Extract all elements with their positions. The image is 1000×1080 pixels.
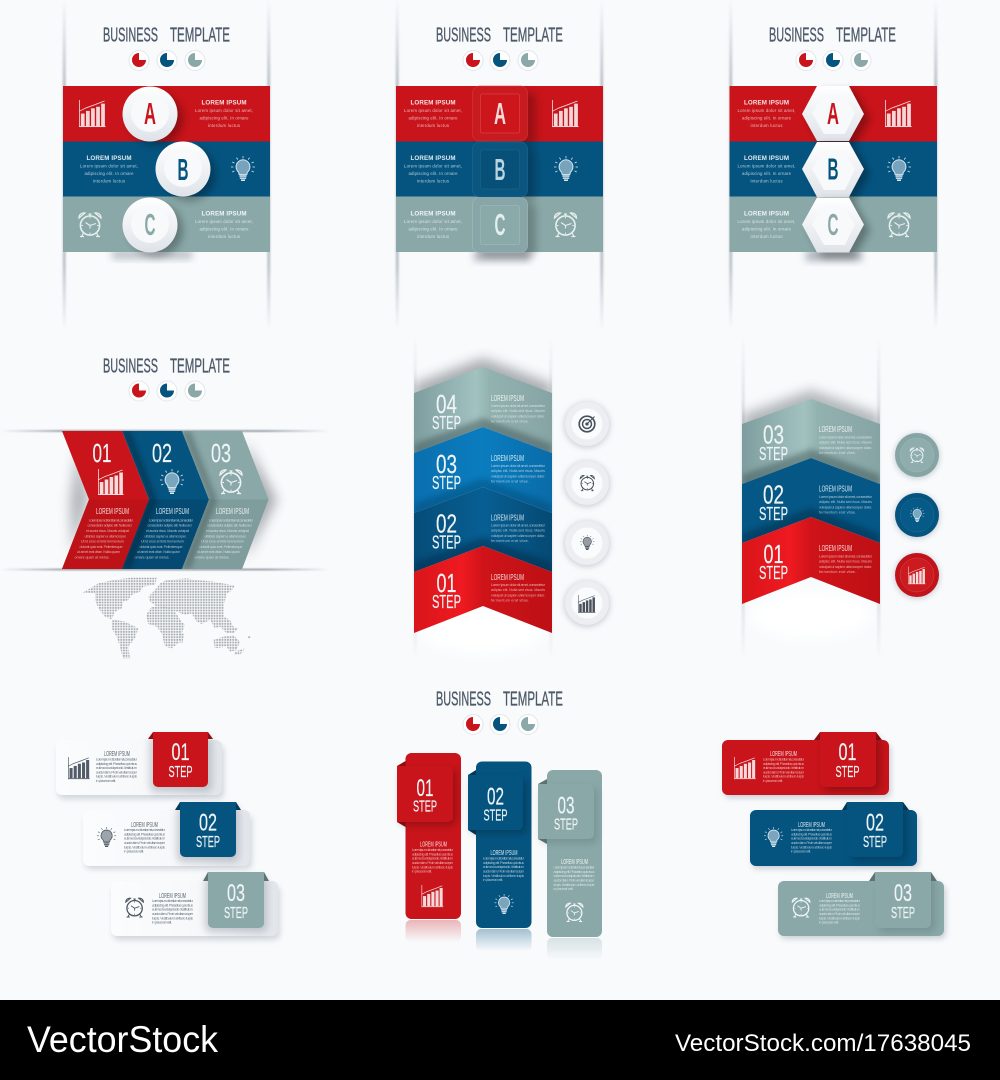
step 01 chevron: STEP [432,591,461,612]
text C: adipiscing elit. In ornare [200,226,249,232]
heading: TEMPLATE [170,356,230,378]
panel: vertical four step chevrons [413,352,612,637]
icon: chart [885,100,912,127]
text A: adipiscing elit. In ornare [408,116,458,120]
text C: Lorem ipsum dolor sit amet, [195,219,253,224]
glass badge B: B [494,152,506,187]
step 02 chevron: STEP [759,503,788,524]
panel: template C hexagons [730,0,937,330]
column 03: euismod a volutpat odio. Vestibulum [554,874,594,878]
icon badge: clock [564,461,610,507]
card 01: Lorem ipsum dolor sit amet, consectetur [96,758,138,762]
chevron 02: Ut id eros et felis fermentum [141,540,184,544]
card 01: turpis. Vestibulum at libero turpis [96,775,137,779]
text B: Lorem ipsum dolor sit amet, [80,164,138,168]
step 03 chevron [414,427,552,520]
chevron 01: 01 [92,438,112,468]
footer bar [0,1000,1000,1080]
text C: interdum luctus [417,234,449,239]
glass badge C [472,198,536,257]
card 02: Lorem ipsum dolor sit amet, consectetur [791,828,833,832]
card 03: euismod a volutpat odio. Vestibulum [152,908,193,912]
text C [738,210,796,239]
heading: BUSINESS [436,24,491,46]
chevron 02: Lorem ipsum dolor sit amet, consectetur [149,518,194,522]
text A: LOREM IPSUM [410,100,456,106]
chevron shadows [70,440,277,560]
column 01: turpis. Vestibulum at libero turpis [412,865,453,869]
hexagon badge A: A [827,96,839,131]
step 02 chevron: 02 [763,480,784,510]
chevron 02: 02 [152,438,172,468]
column 03: auctor diam. Proin vel ullamcorper [554,878,595,882]
chevron 01: et auctor risus. Mauris volutpat [86,529,129,533]
pie icons [463,714,538,734]
card 03: 03 [227,880,245,907]
card 02: adipiscing elit. Phasellus quis risus [791,832,832,836]
badge C: C [144,207,156,242]
text A: LOREM IPSUM [202,100,246,106]
chevron 03: Ut id eros et felis fermentum [201,540,244,544]
text B: adipiscing elit. In ornare [742,171,792,176]
card 02: 02 [199,810,217,836]
panel: colored cards with tabs [722,732,946,939]
badge A [122,86,183,146]
pie icons [796,50,871,70]
text A: LOREM IPSUM [744,100,789,106]
card 01: LOREM IPSUM [104,751,130,758]
text C: adipiscing elit. In ornare [742,226,792,232]
card 03: in placerat velit. [819,921,839,925]
chevron 02: et auctor risus. Mauris volutpat [146,529,189,533]
text A [738,100,796,128]
card 03: turpis. Vestibulum at libero turpis [819,916,860,920]
chevron 01: consectetur adipisc elit. Nulla sed [88,524,132,528]
text C: interdum luctus [208,234,240,239]
column 03: LOREM IPSUM [561,859,588,866]
step 02 chevron: volutpat ut sapien ullamcorper dolor. [819,505,872,509]
column 03: STEP [554,816,578,834]
chevron 02: ultricies sapien a ullamcorper. [144,534,187,538]
icon: bulb [231,156,255,181]
icon badge: chart [564,581,610,627]
chevron 01: ornare quam at metus. [74,556,110,560]
text B: Lorem ipsum dolor sit amet, [738,164,796,168]
column 03: 03 [558,792,574,820]
chevron 03: ornare quam at metus. [194,556,230,560]
column 01: LOREM IPSUM [420,842,447,848]
colored bands [396,86,603,261]
text A [404,100,462,128]
card 01: adipiscing elit. Phasellus quis risus [96,762,137,766]
step 04 chevron: STEP [432,412,461,433]
step 01 chevron: volutpat ut sapien ullamcorper dolor. [819,565,872,569]
text B: interdum luctus [417,178,449,184]
step 04 chevron: 04 [436,389,457,419]
chevron 02 [122,431,209,569]
heading: BUSINESS [436,688,491,710]
card 01: euismod a volutpat odio. Vestibulum [763,766,804,770]
badge C [122,198,183,257]
step 02 chevron: volutpat ut sapien ullamcorper dolor. [491,534,545,538]
column 02 [468,762,532,951]
card 03: 03 [894,880,912,907]
white glow below chevrons [423,610,543,654]
step 01 chevron: LOREM IPSUM [491,573,524,582]
card 01 [722,732,891,798]
badge B: B [178,152,188,187]
step 01 chevron [742,517,880,604]
card 03: in placerat velit. [152,921,172,925]
text B: LOREM IPSUM [744,155,789,162]
card 03: LOREM IPSUM [826,893,853,900]
text B: interdum luctus [93,178,125,184]
column 02: auctor diam. Proin vel ullamcorper [483,870,525,874]
text C: LOREM IPSUM [744,210,789,218]
chevron 03: consectetur adipisc elit. Nulla sed [208,524,252,528]
step 01 chevron: 01 [764,539,784,569]
dotted world map [83,578,251,658]
card 02: Lorem ipsum dolor sit amet, consectetur [124,828,166,832]
text A: interdum luctus [750,123,782,128]
chevron 02: dolorat quis erat. Pellentesque [140,545,182,549]
text A: Lorem ipsum dolor sit amet, [404,108,462,113]
card 03 [111,872,280,940]
step 03 chevron: STEP [759,443,788,464]
card 01: auctor diam. Proin vel ullamcorper [96,770,138,774]
text B: LOREM IPSUM [410,155,456,162]
step 03 chevron: STEP [432,472,461,493]
card 02: turpis. Vestibulum at libero turpis [124,845,165,849]
heading: TEMPLATE [503,688,563,710]
column 03: in placerat velit. [554,887,574,891]
step 03 chevron: 03 [436,449,457,479]
chevron 03: 03 [211,438,231,468]
text B [80,155,138,184]
card 02 [750,802,919,869]
step 02 chevron: adipisc elit. Nulla sed risus. Mauris [491,529,545,533]
hexagon badge B: B [828,152,838,186]
glass badge A [472,86,536,146]
step 01 chevron [414,546,552,633]
step 03 chevron: Lorem ipsum dolor sit amet, consectetur [819,436,873,440]
column 02: in placerat velit. [483,878,503,882]
text B [404,155,462,184]
card 02 [83,802,252,869]
text B [738,155,796,184]
step 01 chevron: fermentum erat vitae. [491,599,529,603]
text C: Lorem ipsum dolor sit amet, [738,219,796,224]
card 02: STEP [196,834,220,851]
text A: Lorem ipsum dolor sit amet, [195,108,253,113]
step 01 chevron: 01 [436,568,456,598]
card 03: euismod a volutpat odio. Vestibulum [819,908,860,912]
white glow below chevrons [751,591,871,639]
chevron shadow [414,358,552,400]
card 01: Lorem ipsum dolor sit amet, consectetur [763,758,805,762]
text C: LOREM IPSUM [410,210,456,218]
panel: vertical three step chevrons [741,361,942,640]
text A [195,100,253,128]
text B: Lorem ipsum dolor sit amet, [404,164,462,168]
icon badge: bulb [564,521,610,567]
icon: clock [79,213,101,236]
card 03: turpis. Vestibulum at libero turpis [152,916,193,920]
chevron 02: LOREM IPSUM [156,507,189,516]
column 01: auctor diam. Proin vel ullamcorper [412,861,454,865]
heading: BUSINESS [103,356,158,378]
chevron 03: Lorem ipsum dolor sit amet, consectetur [209,518,254,522]
step 01 chevron: Lorem ipsum dolor sit amet, consectetur [819,554,873,558]
text A: interdum luctus [208,123,240,128]
column 01: euismod a volutpat odio. Vestibulum [412,857,453,861]
text A: interdum luctus [417,123,449,128]
heading: TEMPLATE [170,24,230,46]
chevron 03: ultricies sapien a ullamcorper. [204,534,247,538]
heading: TEMPLATE [503,24,563,46]
panel: vertical columns [397,688,602,960]
panel: horizontal chevrons with world map [0,356,330,658]
card 01: euismod a volutpat odio. Vestibulum [96,766,137,770]
card 03: LOREM IPSUM [159,893,186,900]
card 03: STEP [224,905,248,922]
chevron 01 [62,431,149,569]
step 02 chevron: fermentum erat vitae. [491,539,529,543]
step 04 chevron: LOREM IPSUM [491,394,524,403]
brand name: VectorStock [27,1019,218,1060]
step 02 chevron: fermentum erat vitae. [819,511,856,515]
column 01: STEP [413,798,437,816]
step 01 chevron: STEP [759,562,788,583]
step 04 chevron: Lorem ipsum dolor sit amet, consectetur [491,404,546,408]
card 03: adipiscing elit. Phasellus quis risus [152,903,193,907]
text A: adipiscing elit. In ornare [200,116,249,120]
text C: interdum luctus [750,234,782,239]
glass badge B [472,142,536,201]
step 02 chevron: LOREM IPSUM [491,514,524,522]
card 01: STEP [168,764,192,781]
text B: adipiscing elit. In ornare [84,171,134,176]
card 01: turpis. Vestibulum at libero turpis [763,775,804,779]
icon: bulb [887,156,911,181]
step 03 chevron: fermentum erat vitae. [491,480,529,484]
chevron 02: consectetur adipisc elit. Nulla sed [148,524,192,528]
card 02: euismod a volutpat odio. Vestibulum [124,837,165,841]
icon badge: target [564,402,610,448]
column 02: STEP [484,808,508,824]
chevron 02: ut amet erat vitae. Nulla quam [137,550,180,554]
text B: adipiscing elit. In ornare [408,171,458,176]
column 03: Lorem ipsum dolor sit amet, consectetur [554,866,595,870]
text C: adipiscing elit. In ornare [408,226,458,232]
step 02 chevron [414,487,552,579]
icon: chart [552,100,579,127]
glass badge C: C [494,207,506,242]
column 01 [397,753,461,942]
card 01: LOREM IPSUM [770,751,797,758]
step 03 chevron: LOREM IPSUM [491,454,524,463]
card 01 [56,732,224,799]
step 01 chevron: adipisc elit. Nulla sed risus. Mauris [491,588,545,592]
step 04 chevron: adipisc elit. Nulla sed risus. Mauris [491,409,545,413]
text A: adipiscing elit. In ornare [742,116,792,120]
card 02: adipiscing elit. Phasellus quis risus [124,832,165,836]
column 01: adipiscing elit. Phasellus quis risus [412,852,453,856]
column 02: 02 [487,784,504,810]
card 01: adipiscing elit. Phasellus quis risus [763,762,804,766]
step 03 chevron: volutpat ut sapien ullamcorper dolor. [491,474,545,478]
chevron 01: Ut id eros et felis fermentum [81,540,124,544]
chevron 01: ut amet erat vitae. Nulla quam [77,550,120,554]
card 03: Lorem ipsum dolor sit amet, consectetur [152,899,194,903]
icon: clock [888,213,910,236]
column 03: adipiscing elit. Phasellus quis risus [554,870,595,874]
icon: bulb [554,156,578,181]
step 02 chevron [742,458,880,550]
icon badge: chart [894,553,940,598]
column 02: adipiscing elit. Phasellus quis risus [483,861,524,865]
step 02 chevron: STEP [432,532,461,552]
step 03 chevron: adipisc elit. Nulla sed risus. Mauris [491,469,545,473]
card 03 [778,872,946,939]
panel: light cards with ribbons [56,732,280,940]
step 04 chevron [414,367,552,460]
glass badge A: A [494,96,506,131]
step 03 chevron [742,399,880,491]
step 01 chevron: LOREM IPSUM [819,544,852,553]
card 01: auctor diam. Proin vel ullamcorper [763,770,805,774]
column 01: Lorem ipsum dolor sit amet, consectetur [412,848,454,852]
text C: LOREM IPSUM [202,210,246,218]
colored bands [730,86,937,261]
pie icons [129,50,205,70]
chevron 03: dolorat quis erat. Pellentesque [200,545,242,549]
column 02: euismod a volutpat odio. Vestibulum [483,865,524,869]
chevron 03 [182,431,268,569]
text B: LOREM IPSUM [86,155,132,162]
badge B [156,142,216,201]
heading: BUSINESS [103,24,158,46]
badge A: A [144,96,156,131]
step 01 chevron: adipisc elit. Nulla sed risus. Mauris [819,560,872,564]
card 01: in placerat velit. [763,779,783,783]
column 03: turpis. Vestibulum at libero turpis [554,883,595,887]
step 02 chevron: 02 [436,508,457,538]
chevron 02: ornare quam at metus. [134,556,170,560]
text A: Lorem ipsum dolor sit amet, [738,108,796,113]
card 03: auctor diam. Proin vel ullamcorper [152,912,194,916]
colored bands [63,86,270,259]
hexagon badge B [802,142,870,201]
card 02: euismod a volutpat odio. Vestibulum [791,837,832,841]
text C [195,210,253,239]
step 03 chevron: Lorem ipsum dolor sit amet, consectetur [491,464,546,468]
chevron 01: dolorat quis erat. Pellentesque [80,545,122,549]
icon: chart [79,100,106,127]
card 02: LOREM IPSUM [131,822,158,829]
step 04 chevron: volutpat ut sapien ullamcorper dolor. [491,414,545,418]
pie icons [463,50,538,70]
card 02: auctor diam. Proin vel ullamcorper [124,841,166,845]
column 02: LOREM IPSUM [490,850,518,857]
text C [404,210,462,239]
step 03 chevron: volutpat ut sapien ullamcorper dolor. [819,446,872,450]
step 01 chevron: fermentum erat vitae. [819,570,856,574]
icon badge: bulb [894,493,940,538]
card 03: adipiscing elit. Phasellus quis risus [819,903,860,907]
card 01: STEP [836,764,860,781]
chevron shadow [742,390,880,432]
card 02: turpis. Vestibulum at libero turpis [791,845,832,849]
step 02 chevron: adipisc elit. Nulla sed risus. Mauris [819,500,872,504]
chevron 01: ultricies sapien a ullamcorper. [84,534,127,538]
heading: BUSINESS [769,24,824,46]
column 02: turpis. Vestibulum at libero turpis [483,874,524,878]
step 02 chevron: LOREM IPSUM [819,484,852,494]
column 03 [538,770,602,960]
icon badge: clock [894,433,940,478]
chevron 03: ut amet erat vitae. Nulla quam [197,550,240,554]
panel: template A circles [63,0,270,330]
card 02: in placerat velit. [124,850,144,854]
card 01: 01 [838,739,856,766]
column 01: in placerat velit. [412,870,432,874]
hexagon badge C [802,198,870,258]
step 03 chevron: 03 [763,420,784,450]
chevron 03: LOREM IPSUM [216,507,249,516]
step 01 chevron: Lorem ipsum dolor sit amet, consectetur [491,583,546,587]
heading: TEMPLATE [836,24,896,46]
card 03: auctor diam. Proin vel ullamcorper [819,912,861,916]
card 02: LOREM IPSUM [798,822,825,829]
image url: VectorStock.com/17638045 [675,1030,971,1057]
text B: interdum luctus [750,178,782,184]
step 03 chevron: adipisc elit. Nulla sed risus. Mauris [819,441,872,445]
step 04 chevron: fermentum erat vitae. [491,420,529,424]
panel: template B squares [396,0,603,330]
card 01: in placerat velit. [96,779,116,783]
card 03: STEP [891,905,915,922]
icon: clock [554,213,577,236]
hexagon badge A [802,86,870,146]
step 03 chevron: LOREM IPSUM [819,425,852,434]
column 02: Lorem ipsum dolor sit amet, consectetur [483,856,525,860]
card 02: auctor diam. Proin vel ullamcorper [791,841,833,845]
hexagon badge C: C [828,207,838,242]
pie icons [129,381,205,401]
chevron 03: et auctor risus. Mauris volutpat [206,529,249,533]
step 02 chevron: Lorem ipsum dolor sit amet, consectetur [491,524,546,528]
card 01: 01 [172,739,190,766]
chevron 01: Lorem ipsum dolor sit amet, consectetur [89,518,134,522]
step 02 chevron: Lorem ipsum dolor sit amet, consectetur [819,495,873,499]
step 03 chevron: fermentum erat vitae. [819,451,856,455]
card 02: in placerat velit. [791,850,811,854]
chevron 01: LOREM IPSUM [96,507,129,516]
card 02: 02 [866,810,884,836]
card 02: STEP [863,834,887,851]
step 01 chevron: volutpat ut sapien ullamcorper dolor. [491,593,545,597]
text C: Lorem ipsum dolor sit amet, [404,219,462,224]
column 01: 01 [416,775,434,802]
card 03: Lorem ipsum dolor sit amet, consectetur [819,899,861,903]
